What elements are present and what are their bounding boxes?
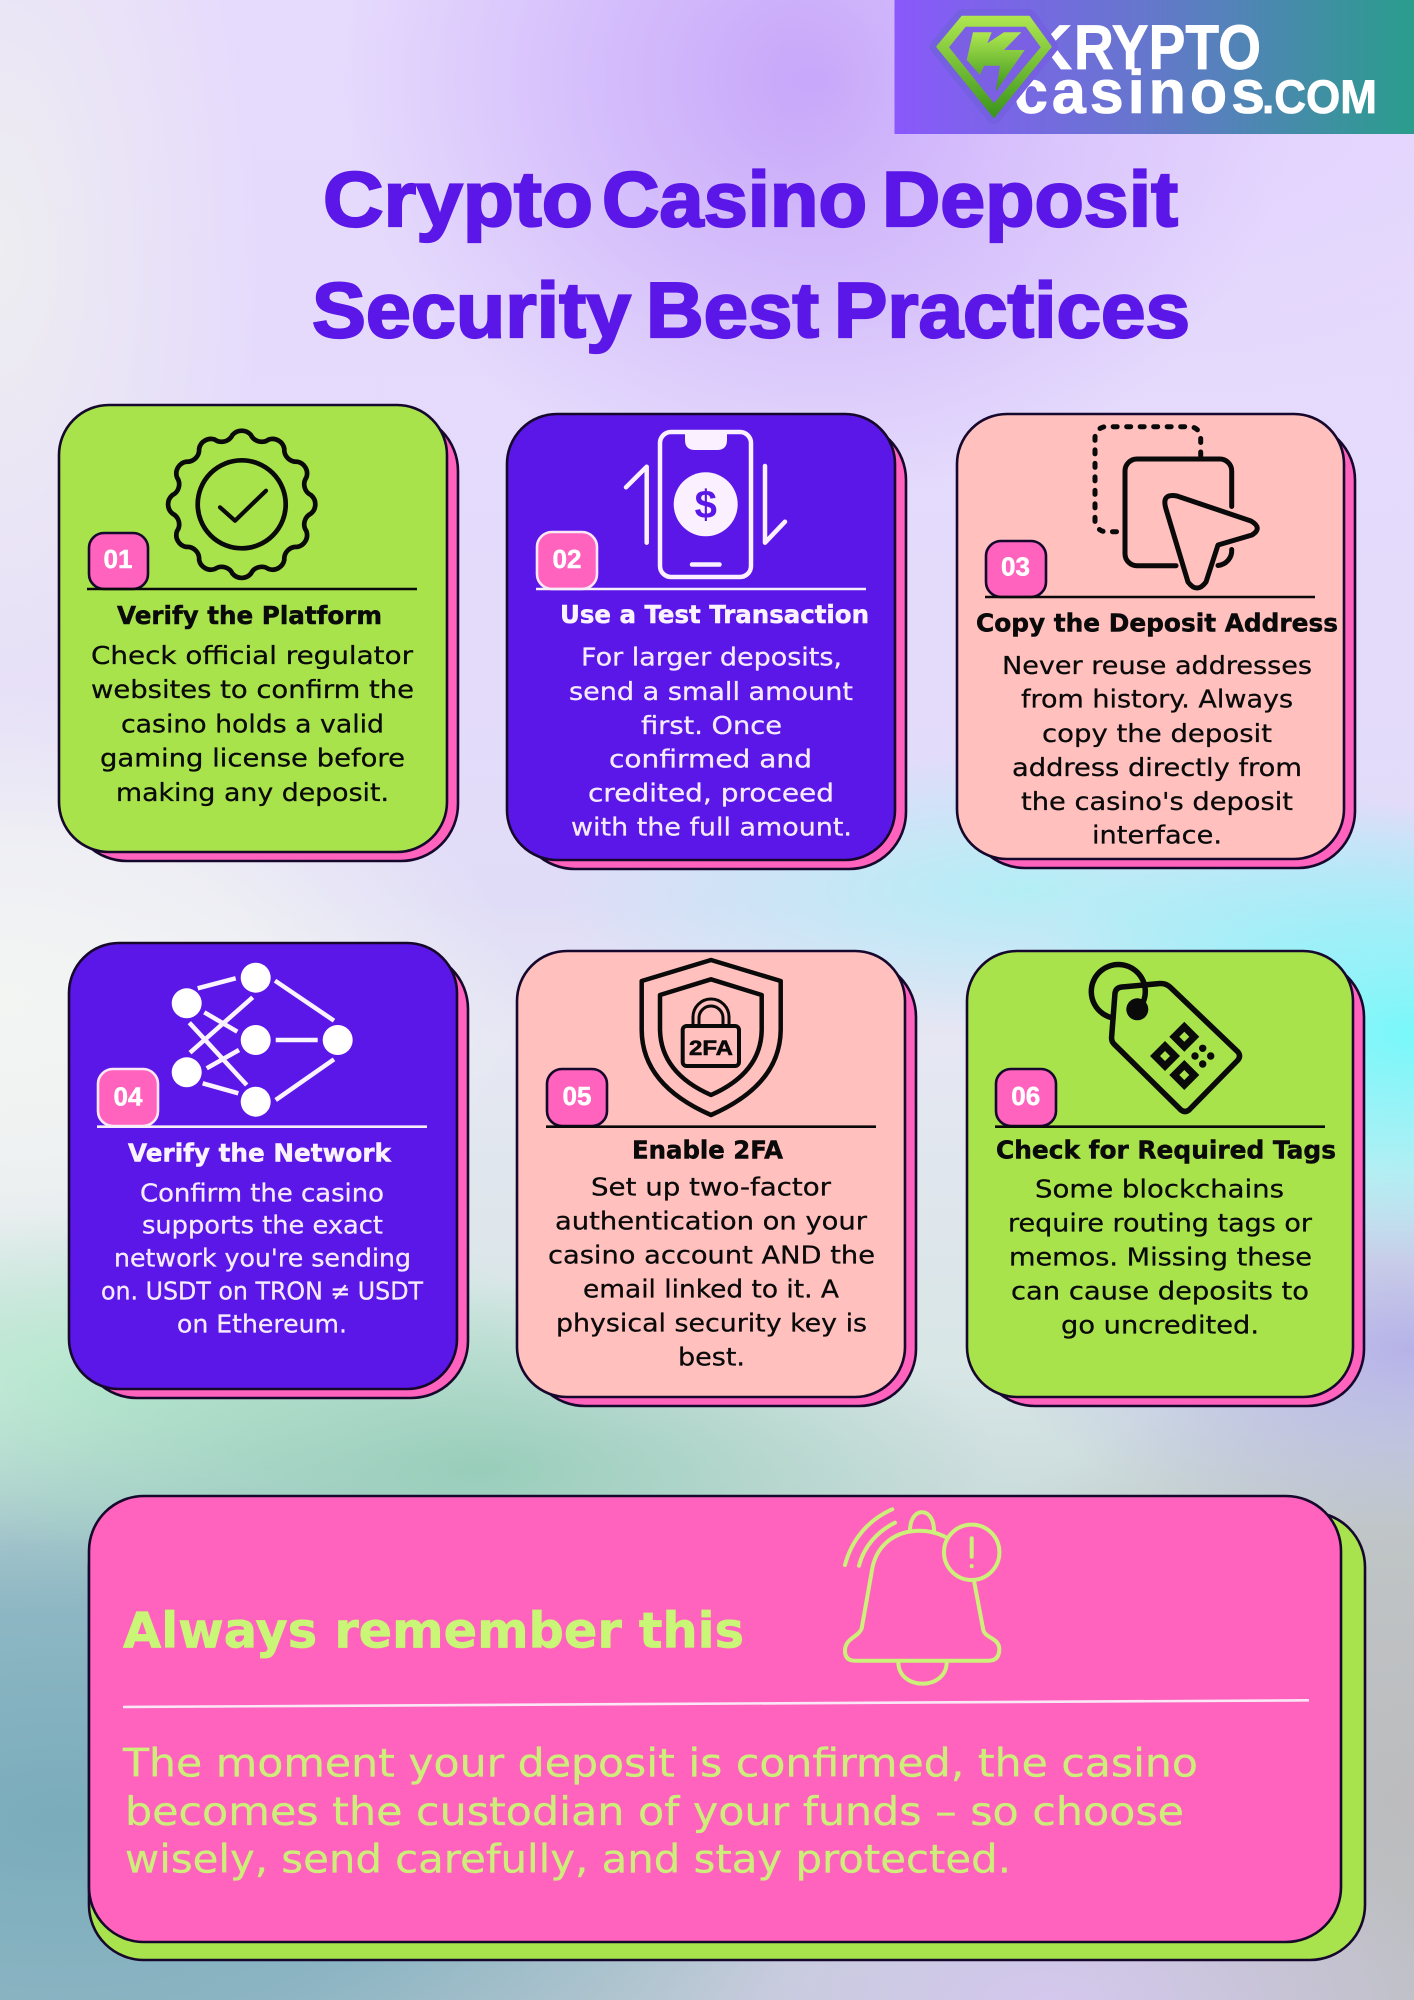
body text: email linked to it. A	[583, 1274, 839, 1304]
logo wordmark: .COM	[1262, 70, 1377, 123]
callout body text: becomes the custodian of your funds – so choose	[125, 1790, 1184, 1835]
body text	[101, 1178, 424, 1338]
body text: Check official regulator	[91, 641, 414, 670]
heading: Verify the Network	[128, 1138, 392, 1168]
logo banner	[894, 0, 1414, 134]
number badge	[98, 1069, 158, 1126]
heading: Enable 2FA	[632, 1136, 784, 1164]
callout body text: The moment your deposit is confirmed, the casino	[122, 1742, 1198, 1786]
icon: phone with dollar and arrows: $	[695, 483, 717, 527]
card body	[957, 414, 1344, 859]
heading: Use a Test Transaction	[560, 600, 869, 629]
number badge	[996, 1069, 1056, 1126]
title: Crypto	[323, 155, 593, 243]
card body	[967, 951, 1353, 1397]
callout body text	[122, 1742, 1198, 1882]
body text: authentication on your	[555, 1206, 868, 1236]
number badge: 05	[563, 1081, 591, 1111]
panel: 03 copy the deposit address	[957, 414, 1355, 868]
body text: send a small amount	[569, 677, 853, 706]
body text	[569, 642, 853, 842]
icon: phone with dollar and arrows	[626, 432, 785, 577]
title: Casino	[602, 155, 867, 243]
body text: For larger deposits,	[581, 642, 842, 672]
card body	[59, 405, 447, 852]
title: Deposit	[882, 155, 1178, 243]
title: Practices	[834, 266, 1190, 354]
body text: go uncredited.	[1061, 1310, 1259, 1340]
body text: interface.	[1092, 820, 1222, 850]
body text	[91, 641, 414, 807]
body text: copy the deposit	[1042, 719, 1272, 748]
body text: casino account AND the	[548, 1240, 875, 1270]
heading: Check for Required Tags	[996, 1136, 1336, 1164]
panel: always remember this	[89, 1496, 1365, 1960]
logo wordmark: RYPTO	[1074, 13, 1261, 83]
icon: network nodes	[172, 963, 353, 1117]
body text: making any deposit.	[116, 778, 389, 807]
panel: 02 use a test transaction	[507, 414, 906, 869]
number badge	[537, 532, 597, 589]
title: Best	[646, 266, 819, 354]
panel: 01 verify the platform	[59, 405, 458, 861]
body text: with the full amount.	[571, 812, 852, 842]
body text: memos. Missing these	[1009, 1242, 1312, 1272]
panel: 06 check for required tags	[967, 951, 1364, 1406]
body text	[548, 1172, 875, 1372]
body text: the casino's deposit	[1021, 787, 1293, 816]
number badge: 06	[1011, 1081, 1040, 1111]
body text: first. Once	[641, 711, 782, 740]
icon: 2FA shield: 2FA	[689, 1037, 733, 1060]
number badge: 01	[104, 544, 132, 574]
body text	[1008, 1174, 1313, 1340]
logo wordmark: K	[1028, 13, 1072, 83]
card shadow	[80, 952, 468, 1398]
card shadow	[528, 960, 916, 1406]
number badge: 04	[114, 1082, 143, 1112]
card shadow	[70, 414, 458, 861]
number badge: 03	[1001, 552, 1030, 582]
card body	[69, 943, 457, 1389]
body text: on Ethereum.	[177, 1310, 347, 1338]
body text: Some blockchains	[1035, 1174, 1284, 1204]
card shadow	[518, 423, 906, 869]
callout body text: wisely, send carefully, and stay protected.	[125, 1838, 1011, 1882]
callout body	[89, 1496, 1341, 1942]
body text: gaming license before	[100, 744, 405, 772]
body text: Set up two-factor	[591, 1172, 832, 1202]
logo diamond emblem	[937, 17, 1051, 117]
body text: require routing tags or	[1008, 1208, 1313, 1238]
panel: 04 verify the network	[69, 943, 468, 1398]
number badge	[986, 541, 1046, 597]
logo background	[894, 0, 1414, 134]
callout heading: Always remember this	[123, 1602, 744, 1660]
body text: network you're sending	[114, 1244, 411, 1272]
number badge	[547, 1069, 607, 1126]
body text: address directly from	[1012, 753, 1302, 782]
icon: verified badge	[168, 431, 315, 578]
body text: can cause deposits to	[1011, 1276, 1309, 1306]
body text	[1002, 651, 1312, 850]
body text: Never reuse addresses	[1002, 651, 1312, 680]
body text: websites to confirm the	[91, 675, 414, 704]
card body	[517, 951, 905, 1397]
title	[312, 155, 1190, 354]
callout shadow	[89, 1512, 1365, 1960]
logo wordmark: casinos	[1014, 58, 1265, 126]
body text: best.	[678, 1342, 745, 1372]
panel: 05 enable 2FA	[517, 951, 916, 1406]
title: Security	[312, 266, 631, 354]
icon: copy with cursor	[1095, 427, 1257, 588]
body text: casino holds a valid	[121, 710, 384, 738]
icon: QR tag	[1091, 965, 1240, 1112]
number badge: 02	[553, 544, 581, 574]
card shadow	[968, 423, 1355, 868]
number badge	[89, 533, 148, 589]
card shadow	[978, 960, 1364, 1406]
body text: supports the exact	[142, 1210, 383, 1240]
body text: credited, proceed	[588, 778, 834, 808]
body text: from history. Always	[1021, 684, 1293, 714]
icon: alert bell	[845, 1509, 999, 1684]
icon: 2FA shield	[642, 960, 781, 1115]
heading: Verify the Platform	[117, 601, 382, 630]
body text: on. USDT on TRON ≠ USDT	[101, 1276, 424, 1306]
card body	[507, 414, 895, 860]
body text: physical security key is	[556, 1308, 867, 1338]
logo wordmark	[1014, 13, 1377, 126]
body text: confirmed and	[609, 744, 812, 774]
heading: Copy the Deposit Address	[976, 608, 1338, 638]
body text: Confirm the casino	[140, 1178, 384, 1208]
